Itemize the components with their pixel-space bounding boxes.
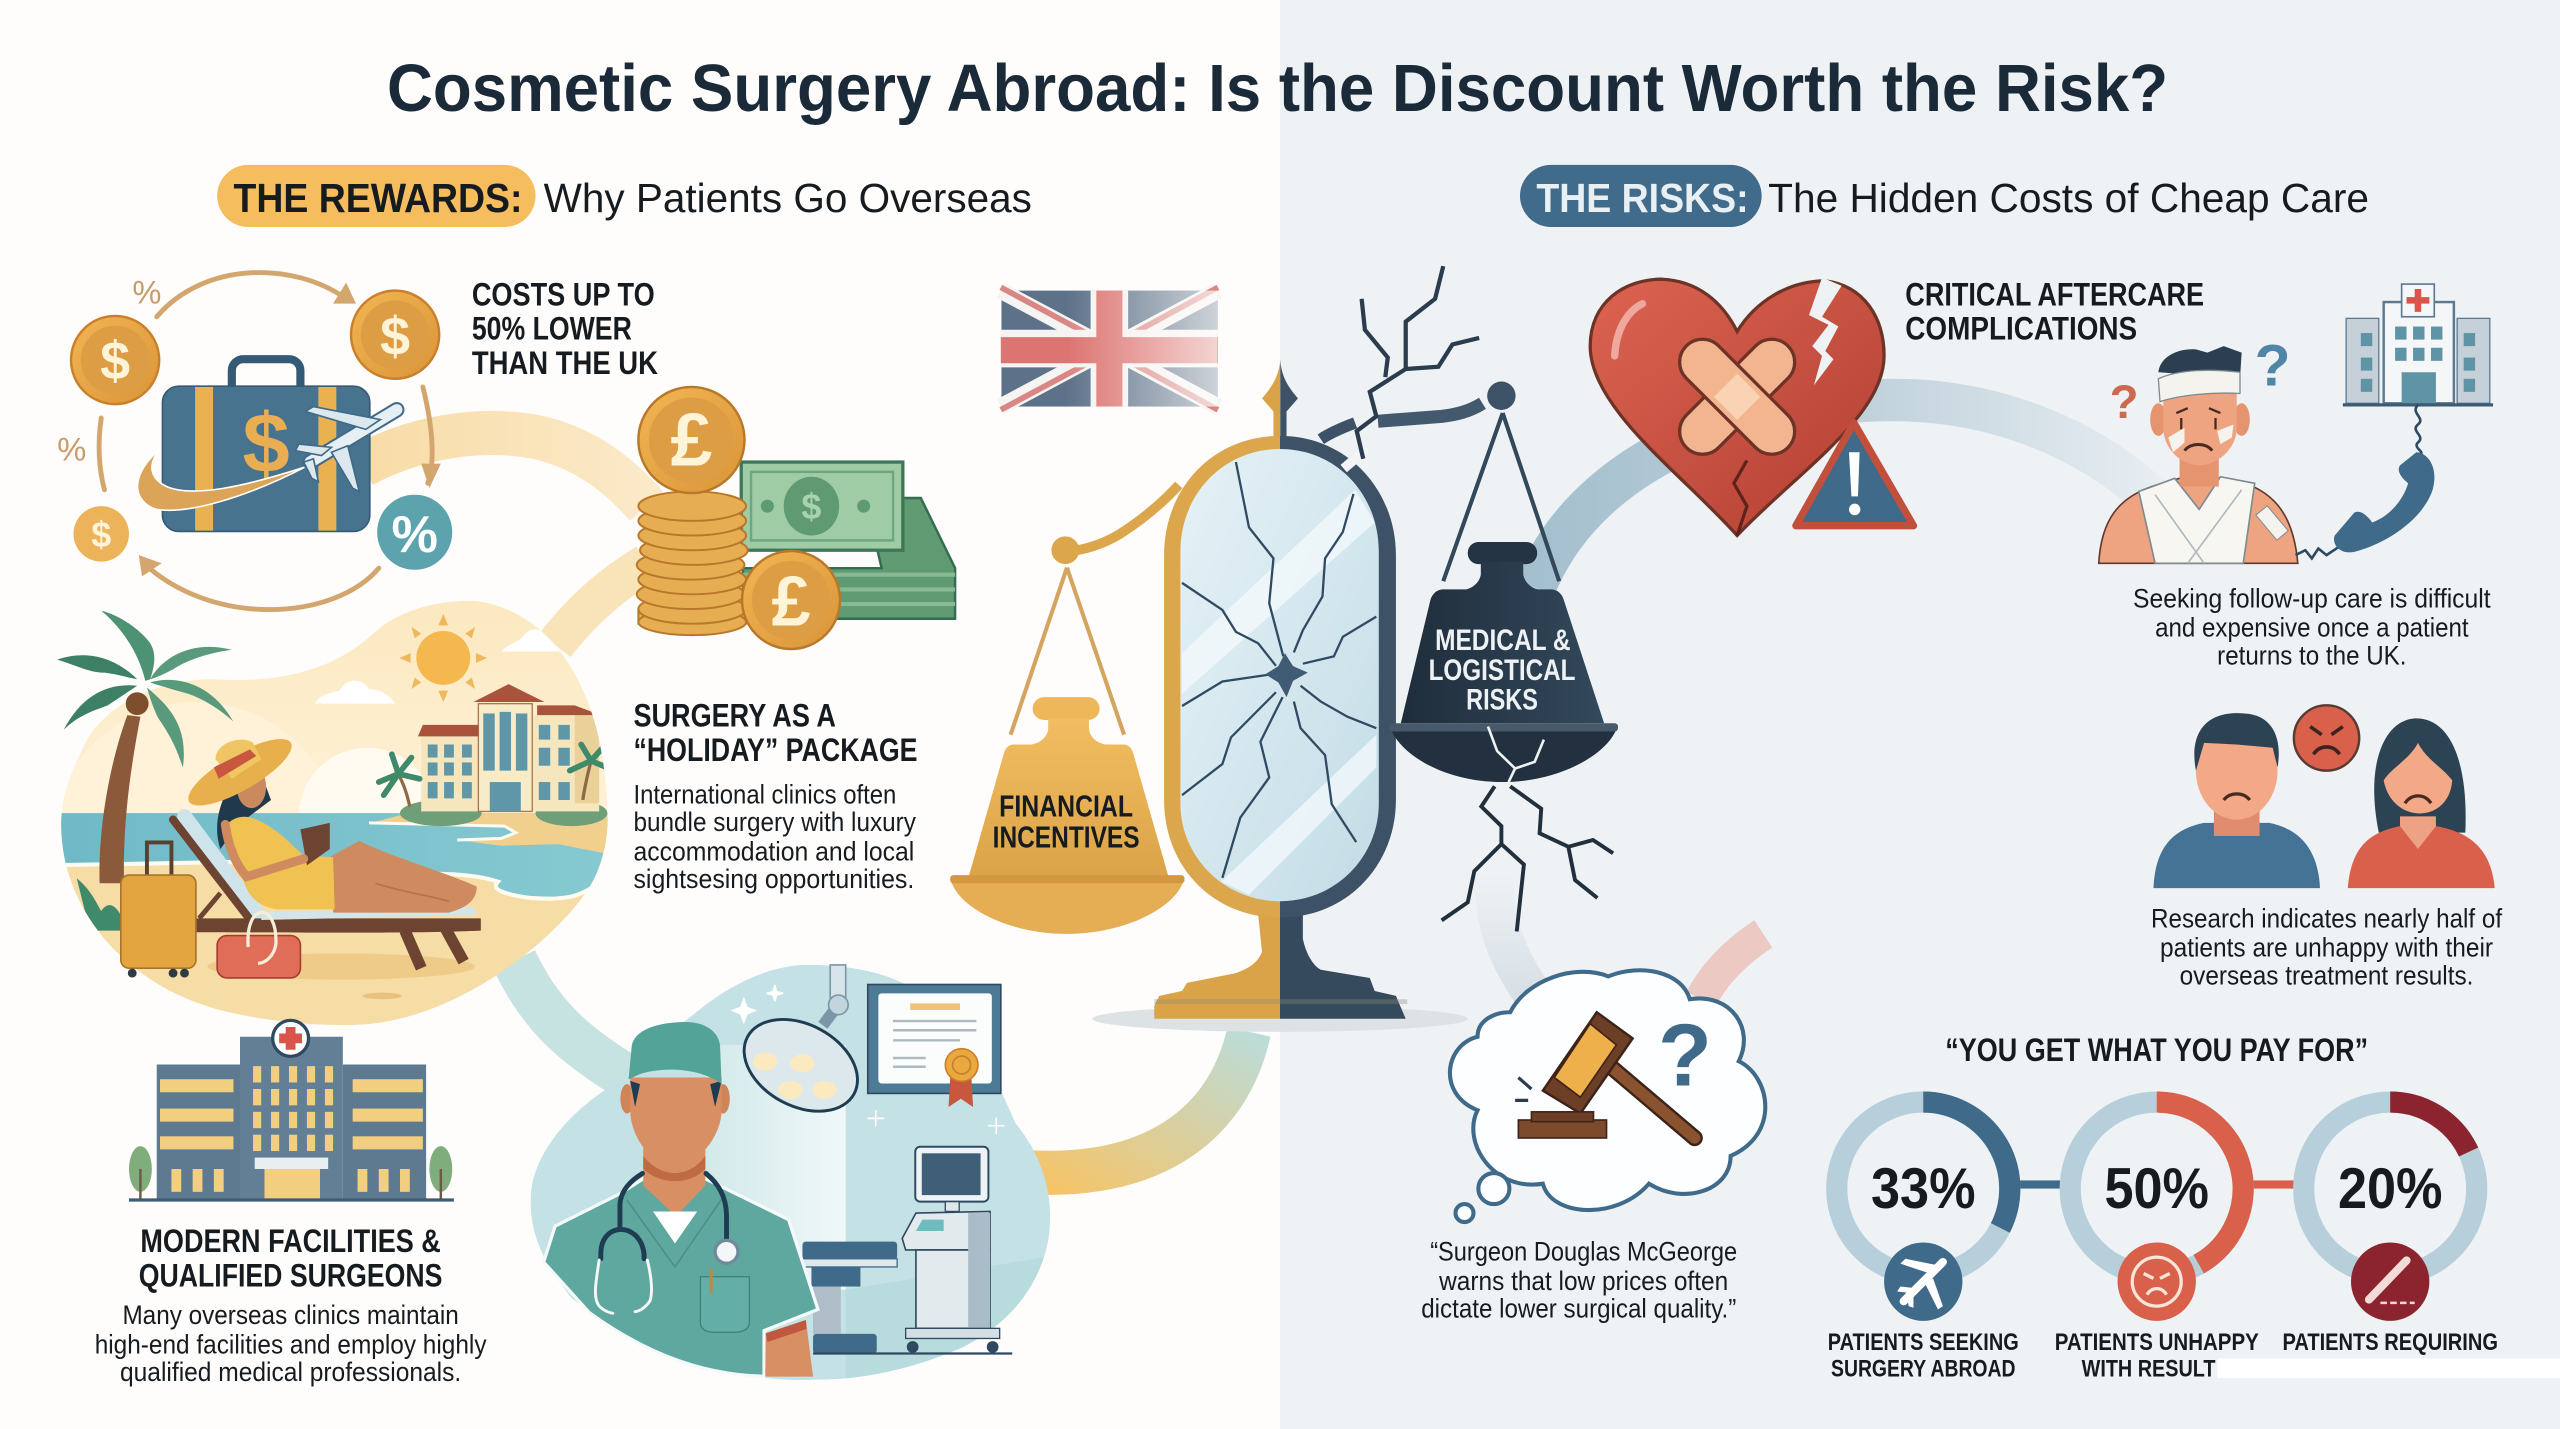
icon: suitcase and currency cycle: $ <box>91 514 111 555</box>
illustration: unhappy couple <box>2153 705 2495 888</box>
text: costs up to 50% lower <box>472 275 658 381</box>
background: risks side <box>1280 0 2560 1429</box>
icon: suitcase and currency cycle <box>57 273 452 610</box>
text: surgery as a holiday package: International clinics often <box>633 779 896 809</box>
text: modern facilities and qualified surgeons: MODERN FACILITIES & <box>140 1222 441 1259</box>
donut chart: 20 percent: 20% <box>2338 1157 2442 1221</box>
icon: suitcase and currency cycle: $ <box>380 306 410 366</box>
background: rewards side <box>0 0 1280 1429</box>
lounger <box>173 816 481 968</box>
heading: the risks <box>1520 165 2369 227</box>
label: patients requiring: PATIENTS REQUIRING <box>2282 1329 2498 1356</box>
yellow suitcase <box>121 842 196 977</box>
icon: coins and banknotes: £ <box>671 397 712 481</box>
donut chart: 50 percent <box>2070 1102 2243 1321</box>
text: surgery as a holiday package: accommodation and local <box>633 836 914 866</box>
text: surgeon quote <box>1421 1236 1737 1324</box>
foreground plant <box>76 878 120 931</box>
surgical lamp <box>728 965 873 1130</box>
icon: coins and banknotes: £ <box>771 561 811 640</box>
red handbag <box>217 912 300 978</box>
text: surgery as a holiday package: “HOLIDAY” PACKAGE <box>633 731 918 768</box>
heading: you get what you pay for: “YOU GET WHAT YOU PAY FOR” <box>1945 1031 2368 1068</box>
base <box>1154 914 1280 1019</box>
title: Cosmetic Surgery Abroad: Is the Discount Worth the Risk? <box>387 51 2168 126</box>
text: costs up to 50% lower: 50% LOWER <box>472 310 632 347</box>
text: critical aftercare complications: COMPLICATIONS <box>1905 310 2137 347</box>
text: critical aftercare complications: CRITICAL AFTERCARE <box>1905 275 2204 312</box>
icon: thought cloud with gavel <box>1450 970 1765 1222</box>
icon: warning triangle <box>1796 423 1913 526</box>
label: patients unhappy with result <box>2055 1329 2259 1382</box>
weight: medical and logistical risks: LOGISTICAL <box>1429 654 1576 687</box>
text: seeking follow-up care: and expensive once a patient <box>2155 613 2469 643</box>
text: seeking follow-up care <box>2133 583 2491 670</box>
donut chart: 33 percent <box>1837 1102 2010 1321</box>
central scale and cracked mirror <box>1051 266 1516 1032</box>
cracks above <box>1357 266 1479 459</box>
text: surgeon quote: warns that low prices often <box>1438 1266 1728 1296</box>
text: modern facilities and qualified surgeons <box>95 1222 487 1387</box>
heading: the rewards: Why Patients Go Overseas <box>544 175 1032 221</box>
text: surgeon quote: dictate lower surgical quality.” <box>1421 1294 1736 1324</box>
weight: financial incentives: INCENTIVES <box>993 821 1140 854</box>
text: surgery as a holiday package: sightsesing opportunities. <box>633 864 914 894</box>
donut chart: 33 percent: 33% <box>1871 1157 1976 1221</box>
mirror glass <box>1180 449 1379 901</box>
operating table <box>802 1242 897 1353</box>
mirror frame <box>1164 436 1280 918</box>
illustration: beach holiday scene <box>49 588 620 1033</box>
icon: suitcase and currency cycle: % <box>391 506 438 564</box>
text: research indicates: patients are unhappy with their <box>2160 933 2493 963</box>
text: costs up to 50% lower: THAN THE UK <box>472 344 658 381</box>
label: patients seeking surgery abroad <box>1828 1329 2019 1382</box>
icon: thought cloud with gavel: ? <box>1658 1006 1712 1105</box>
icon: suitcase and currency cycle: $ <box>100 331 130 391</box>
text: modern facilities and qualified surgeons: Many overseas clinics maintain <box>122 1300 459 1330</box>
palm tree <box>57 611 233 883</box>
label: patients unhappy with result: WITH RESULT <box>2082 1355 2216 1382</box>
text: surgery as a holiday package: SURGERY AS A <box>633 697 836 734</box>
text: critical aftercare complications <box>1905 275 2204 347</box>
text: surgery as a holiday package: bundle surgery with luxury <box>633 807 916 837</box>
icon: suitcase and currency cycle: $ <box>243 395 290 490</box>
heading: the risks: The Hidden Costs of Cheap Care <box>1768 175 2369 221</box>
icon: suitcase and currency cycle: % <box>132 274 161 311</box>
text: seeking follow-up care: returns to the UK. <box>2217 640 2407 670</box>
woman reading <box>180 727 477 913</box>
icon: hospital with phone <box>2296 284 2493 558</box>
heading: the risks: THE RISKS: <box>1536 175 1749 221</box>
illustration: injured patient: ? <box>2255 333 2291 398</box>
icon: suitcase and currency cycle: % <box>57 430 86 467</box>
text: surgery as a holiday package <box>633 697 918 894</box>
crack through frame <box>1344 449 1367 469</box>
heading: the rewards: THE REWARDS: <box>233 175 522 221</box>
illustration: injured patient <box>2099 333 2298 563</box>
text: research indicates <box>2151 903 2503 990</box>
sun <box>399 614 487 702</box>
illustration: surgeon and operating room <box>522 955 1061 1388</box>
weight: financial incentives <box>950 568 1184 934</box>
text: modern facilities and qualified surgeons: high-end facilities and employ highly <box>95 1329 487 1359</box>
connecting ribbons: risks side <box>1494 400 2204 1009</box>
donut chart: 20 percent <box>2304 1102 2477 1321</box>
label: patients unhappy with result: PATIENTS UNHAPPY <box>2055 1329 2259 1356</box>
weight: financial incentives: FINANCIAL <box>999 790 1133 823</box>
icon: broken heart with bandage <box>1590 278 1884 536</box>
icon: coins and banknotes: $ <box>801 486 821 527</box>
weight: medical and logistical risks <box>1389 413 1618 931</box>
icon: union flag <box>1001 287 1218 410</box>
label: patients seeking surgery abroad: PATIENTS SEEKING <box>1828 1329 2019 1356</box>
connecting ribbons: rewards side <box>362 433 1249 1173</box>
surgeon <box>544 1022 818 1377</box>
clouds <box>315 681 395 704</box>
icon: coins and banknotes <box>637 387 955 649</box>
weight: medical and logistical risks: MEDICAL & <box>1435 624 1571 657</box>
icon: modern hospital <box>129 1020 454 1200</box>
weight: medical and logistical risks: RISKS <box>1466 683 1538 716</box>
shadow <box>1092 1006 1468 1032</box>
label: patients seeking surgery abroad: SURGERY ABROAD <box>1831 1355 2016 1382</box>
text: surgeon quote: “Surgeon Douglas McGeorge <box>1430 1236 1737 1266</box>
text: modern facilities and qualified surgeons: QUALIFIED SURGEONS <box>139 1257 442 1294</box>
finial <box>1262 360 1280 438</box>
white masking bar <box>2217 1358 2560 1378</box>
text: research indicates: overseas treatment results. <box>2180 960 2473 990</box>
text: seeking follow-up care: Seeking follow-up care is difficult <box>2133 583 2491 613</box>
text: research indicates: Research indicates nearly half of <box>2151 903 2503 933</box>
donut chart: 50 percent: 50% <box>2104 1157 2209 1221</box>
monitor cart <box>813 1147 1012 1353</box>
heading: the rewards <box>217 165 1032 227</box>
right beam <box>1321 423 1355 439</box>
left beam <box>1064 485 1179 552</box>
text: modern facilities and qualified surgeons: qualified medical professionals. <box>120 1357 461 1387</box>
mirror cracks <box>1182 462 1376 878</box>
certificate <box>868 984 1001 1107</box>
hotel <box>379 684 611 826</box>
text: costs up to 50% lower: COSTS UP TO <box>472 275 655 312</box>
connector lines between rings <box>2018 1180 2294 1189</box>
illustration: injured patient: ? <box>2110 376 2139 429</box>
